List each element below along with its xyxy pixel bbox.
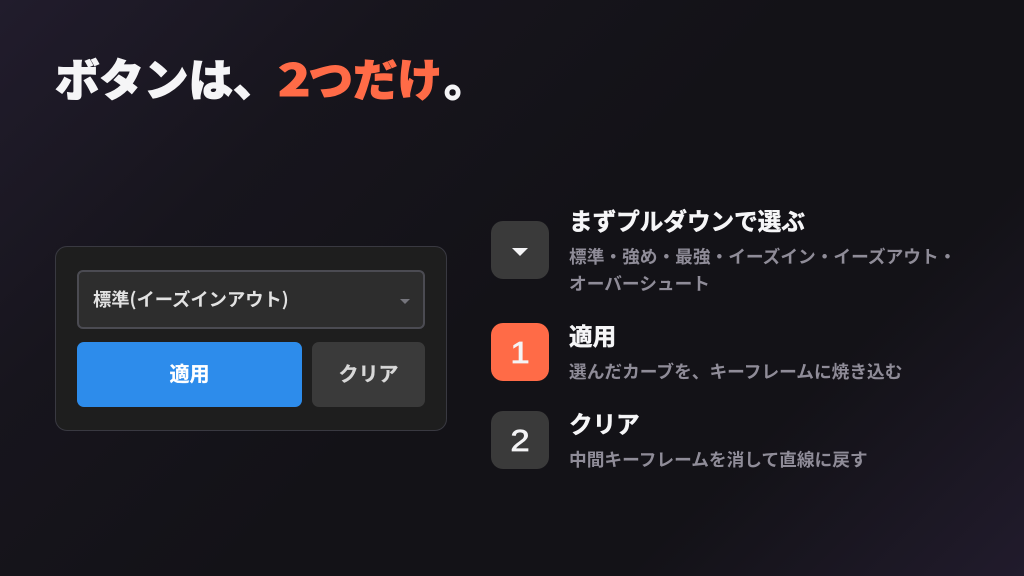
dropdown label: 標準(イーズインアウト) — [93, 286, 289, 312]
text: apply description: 選んだカーブを、キーフレームに焼き込む — [569, 358, 902, 384]
heading: apply: 適用 — [569, 318, 616, 352]
icon: number 1: 1 — [510, 335, 530, 370]
heading: clear: クリア — [569, 406, 640, 440]
icon: number 2: 2 — [510, 423, 530, 458]
title: 2 — [278, 44, 310, 109]
icon: number 2 — [491, 411, 549, 469]
title: ボタンは、 つだけ。 — [55, 44, 489, 109]
icon: dropdown — [491, 221, 549, 279]
apply button: 適用 — [170, 358, 210, 387]
apply button — [77, 342, 302, 407]
text: choose description — [569, 243, 956, 296]
panel: plugin UI — [55, 246, 447, 431]
dropdown arrow — [400, 299, 410, 304]
heading: choose: まずプルダウンで選ぶ — [569, 203, 805, 237]
text: clear description: 中間キーフレームを消して直線に戻す — [569, 446, 868, 472]
clear button: クリア — [338, 358, 398, 387]
text: choose description: オーバーシュート — [569, 270, 710, 296]
icon: number 1 — [491, 323, 549, 381]
icon: triangle — [512, 248, 528, 256]
clear button — [312, 342, 425, 407]
dropdown — [77, 270, 425, 329]
text: choose description: 標準・強め・最強・イーズイン・イーズアウト・ — [569, 243, 956, 269]
